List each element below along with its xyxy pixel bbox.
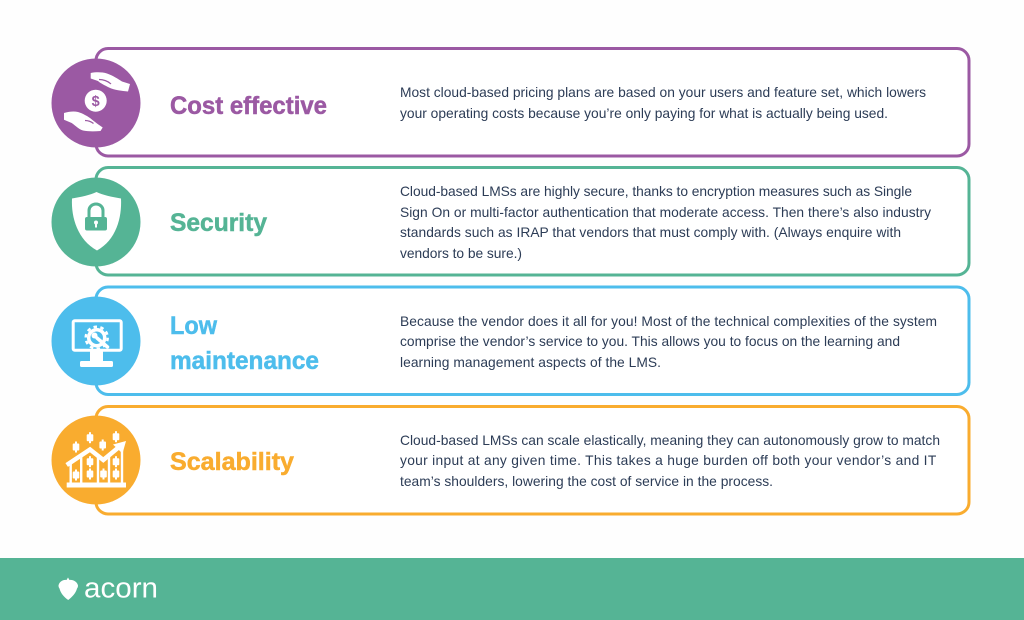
text: scalability: your input at any given time. This takes a huge burden off both your vendor’s and IT bbox=[400, 453, 937, 468]
heading: security: Security bbox=[170, 209, 267, 237]
panel: low maintenance bbox=[52, 287, 969, 394]
footer band bbox=[0, 558, 1024, 620]
text: security: Cloud-based LMSs are highly secure, thanks to encryption measures such as Single bbox=[400, 184, 912, 199]
icon: rising chart bbox=[52, 416, 140, 504]
text: security: vendors to be sure.) bbox=[400, 246, 522, 261]
card outline: low maintenance bbox=[96, 287, 969, 394]
icon: hands with dollar coin: $ bbox=[92, 94, 100, 110]
text: low maintenance: Because the vendor does it all for you! Most of the technical complexities of the system bbox=[400, 314, 937, 329]
logo wordmark: acorn bbox=[84, 572, 158, 604]
text: cost effective: Most cloud-based pricing plans are based on your users and feature set, which lowers bbox=[400, 85, 926, 100]
heading: low maintenance: maintenance bbox=[170, 347, 319, 375]
text: scalability: Cloud-based LMSs can scale elastically, meaning they can autonomously grow to match bbox=[400, 433, 940, 448]
text: cost effective: your operating costs because you’re only paying for what is actually being used. bbox=[400, 106, 888, 121]
card outline: cost effective bbox=[96, 48, 969, 156]
text: security: Sign On or multi-factor authentication that moderate access. Then there’s also industry bbox=[400, 205, 931, 220]
icon: shield with padlock bbox=[52, 178, 140, 266]
heading: low maintenance: Low bbox=[170, 312, 218, 340]
card outline: scalability bbox=[96, 406, 969, 514]
panel: security bbox=[52, 168, 969, 275]
icon: hands with dollar coin bbox=[52, 58, 140, 148]
heading: cost effective: Cost effective bbox=[170, 92, 327, 120]
text: low maintenance: comprise the vendor’s service to you. This allows you to focus on the learning and bbox=[400, 334, 900, 349]
text: low maintenance: learning management aspects of the LMS. bbox=[400, 355, 661, 370]
panel: cost effective bbox=[52, 48, 969, 156]
icon: acorn logo bbox=[58, 578, 78, 600]
card outline: security bbox=[96, 168, 969, 275]
icon: monitor with gear and wrench bbox=[52, 296, 140, 386]
panel: scalability bbox=[52, 406, 969, 514]
heading: scalability: Scalability bbox=[170, 448, 294, 476]
text: security: standards such as IRAP that vendors that must comply with. (Always enquire with bbox=[400, 225, 901, 240]
text: scalability: team’s shoulders, lowering the cost of service in the process. bbox=[400, 474, 773, 489]
